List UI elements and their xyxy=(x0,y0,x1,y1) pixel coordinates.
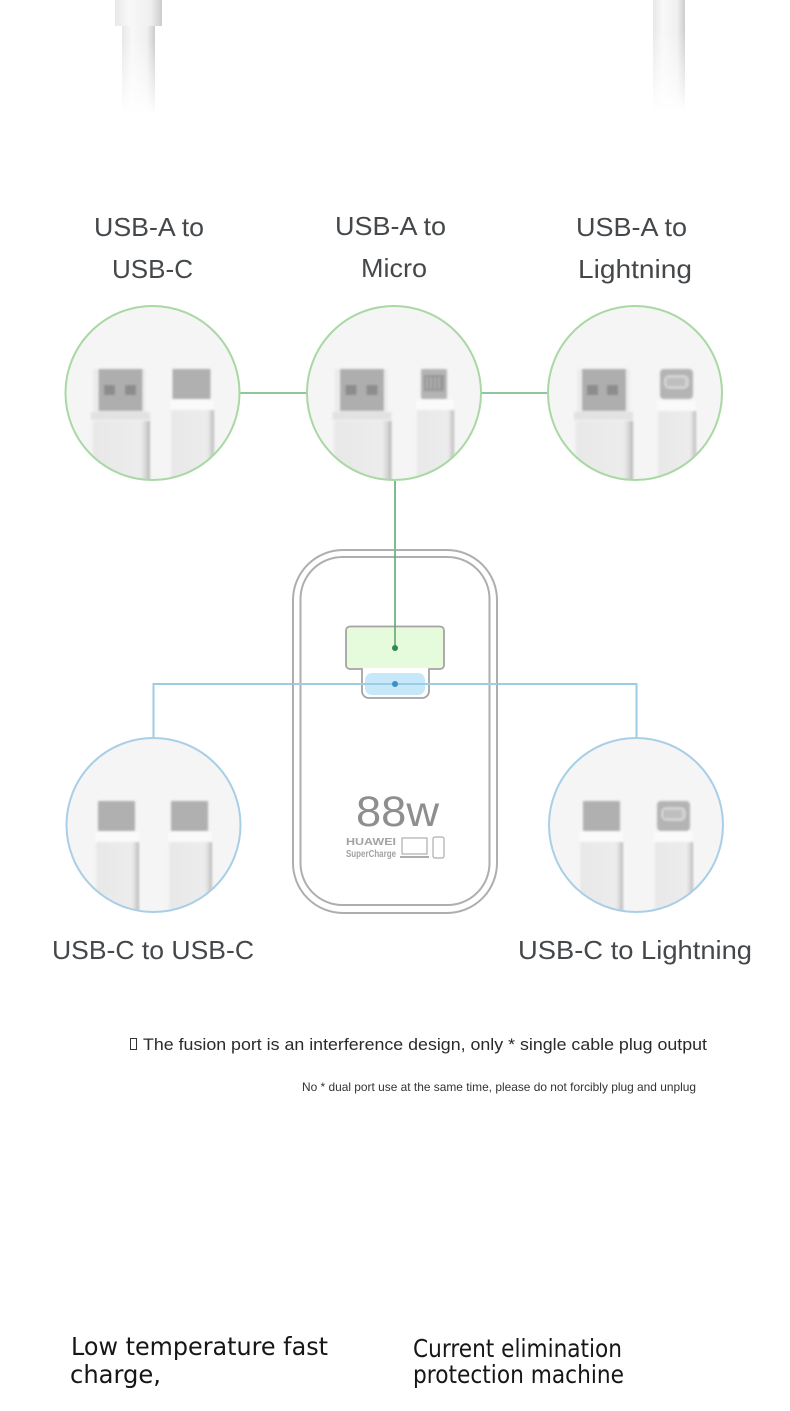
heading: USB-A to Lightning xyxy=(576,212,692,284)
caption: low temperature fast charge: Low temperature fast xyxy=(71,1332,328,1361)
top cable right xyxy=(650,0,688,112)
port dots xyxy=(392,645,398,651)
charger xyxy=(293,550,497,913)
plug: USB-C right xyxy=(168,801,212,914)
label: USB-C to Lightning: USB-C to Lightning xyxy=(518,935,752,965)
plug: USB-A xyxy=(91,369,150,481)
heading: USB-A to USB-C xyxy=(94,212,204,284)
charger body xyxy=(293,550,497,913)
circle: USB-A to Micro xyxy=(307,306,481,481)
caption: low temperature fast charge: charge, xyxy=(70,1360,161,1389)
caption: low temperature fast charge xyxy=(70,1332,328,1389)
circle: USB-A to Lightning xyxy=(548,306,722,481)
heading: USB-A to USB-C: USB-A to xyxy=(94,212,204,242)
plug: USB-A xyxy=(574,369,633,481)
caption: current elimination protection machine: protection machine xyxy=(413,1360,624,1389)
note line 1: The fusion port is an interference design, only * single cable plug output xyxy=(143,1035,707,1054)
icon: phone xyxy=(433,837,444,858)
88w label: 88w xyxy=(356,788,440,836)
plug: Lightning xyxy=(654,801,693,914)
top cable left xyxy=(115,0,162,115)
plug: Micro USB xyxy=(416,369,454,480)
brand text: SuperCharge xyxy=(346,849,396,860)
port lines over xyxy=(293,683,497,685)
heading: USB-A to Lightning: USB-A to xyxy=(576,212,687,242)
heading: USB-A to Micro: Micro xyxy=(361,253,427,283)
icon: laptop xyxy=(400,838,429,857)
fusion port xyxy=(346,626,444,698)
note line 2: No * dual port use at the same time, please do not forcibly plug and unplug xyxy=(302,1080,696,1094)
circle: USB-C to Lightning xyxy=(549,738,723,914)
plug: USB-C left xyxy=(95,801,139,914)
connector lines blue xyxy=(154,684,636,739)
caption: current elimination protection machine: Current elimination xyxy=(413,1334,622,1363)
label: USB-C to USB-C: USB-C to USB-C xyxy=(52,935,254,965)
circle: USB-C to USB-C xyxy=(66,738,240,914)
heading: USB-A to Micro: USB-A to xyxy=(335,211,446,241)
connector lines green xyxy=(240,393,549,648)
brand text xyxy=(346,836,396,860)
plug: USB-C xyxy=(579,801,623,914)
brand text: HUAWEI xyxy=(346,836,396,848)
plug: USB-A xyxy=(332,369,392,481)
heading: USB-A to Micro xyxy=(335,211,446,283)
circle: USB-A to USB-C xyxy=(66,306,240,481)
heading: USB-A to Lightning: Lightning xyxy=(578,254,692,284)
heading: USB-A to USB-C: USB-C xyxy=(112,254,193,284)
plug: Lightning xyxy=(657,369,696,481)
plug: USB-C xyxy=(170,369,214,480)
caption: current elimination protection machine xyxy=(413,1334,624,1389)
